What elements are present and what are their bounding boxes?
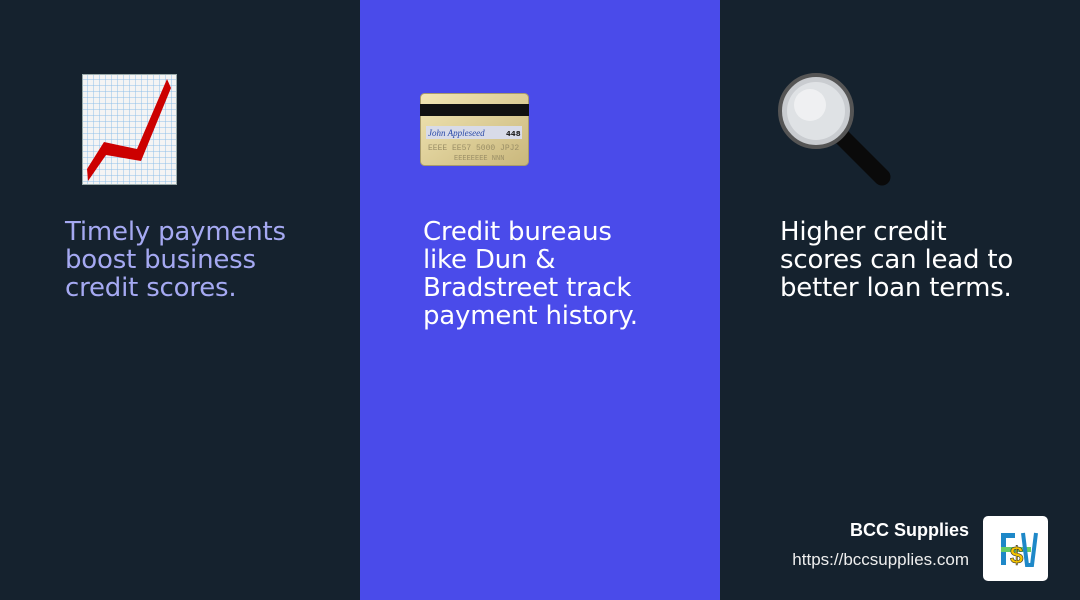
icon: credit card: John Appleseed — [428, 128, 485, 138]
text: higher credit scores: Higher credit — [780, 217, 946, 247]
icon: magnifying glass — [778, 73, 890, 186]
logo: $ — [1010, 542, 1024, 569]
text: credit bureaus: like Dun & — [423, 245, 555, 275]
logo — [983, 516, 1048, 581]
text: higher credit scores: better loan terms. — [780, 273, 1012, 303]
panel: higher credit scores — [720, 0, 1080, 600]
text: higher credit scores — [780, 217, 1013, 303]
brand name: BCC Supplies — [850, 520, 969, 540]
brand footer — [792, 516, 1048, 581]
text: timely payments: Timely payments — [65, 217, 286, 247]
icon: credit card — [420, 93, 529, 166]
text: timely payments: boost business — [65, 245, 256, 275]
icon: credit card: EEEE EE57 5000 JPJ2 — [428, 144, 519, 153]
panel: timely payments — [0, 0, 360, 600]
text: credit bureaus — [423, 217, 638, 331]
text: timely payments: credit scores. — [65, 273, 236, 303]
icon: credit card: EEEEEEEE NNN — [454, 155, 504, 163]
panel: credit bureaus — [360, 0, 720, 600]
brand url: https://bccsupplies.com — [792, 550, 969, 569]
icon: chart increasing — [82, 74, 177, 185]
text: credit bureaus: Credit bureaus — [423, 217, 612, 247]
text: higher credit scores: scores can lead to — [780, 245, 1013, 275]
text: credit bureaus: Bradstreet track — [423, 273, 631, 303]
text: timely payments — [64, 217, 286, 303]
icon: credit card: 448 — [506, 130, 521, 138]
text: credit bureaus: payment history. — [423, 301, 638, 331]
